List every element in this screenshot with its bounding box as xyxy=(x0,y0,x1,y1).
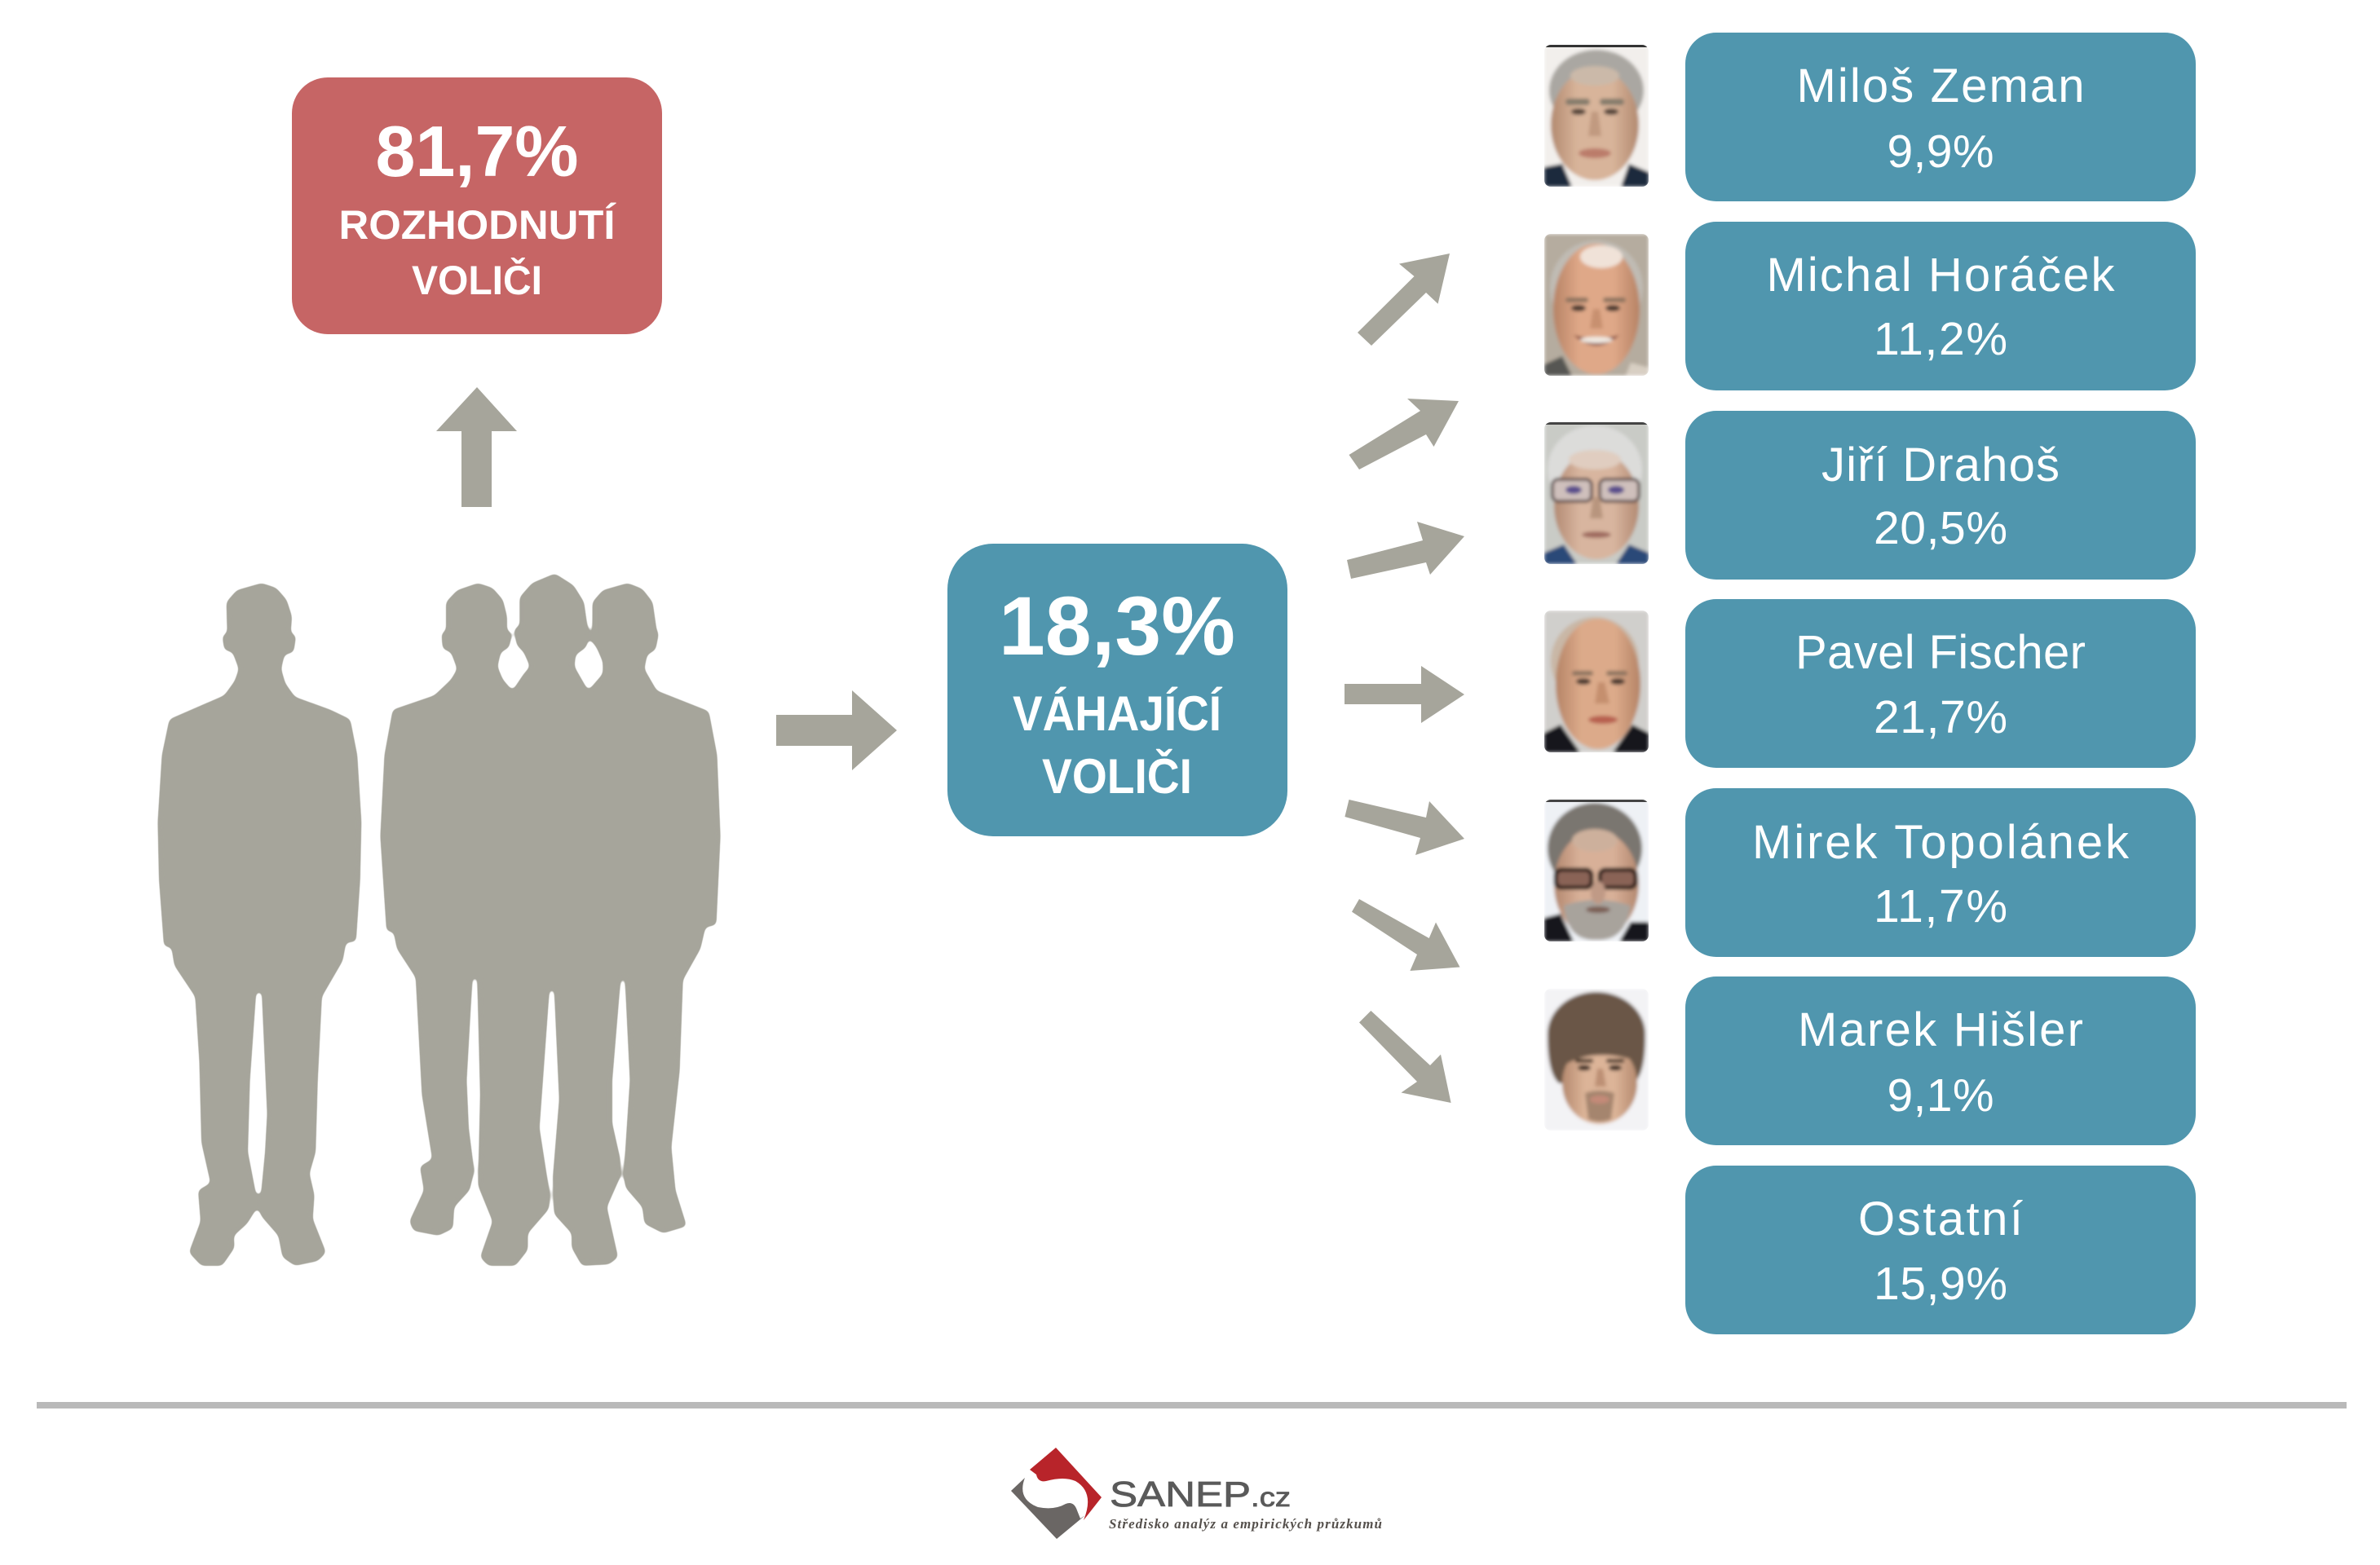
portrait: Mirek Topolánek xyxy=(1544,800,1649,941)
portrait: Jiří Drahoš xyxy=(1544,422,1649,564)
arrow: to Hišler upper xyxy=(1352,899,1459,971)
panel: Ostatní result: 15,9% xyxy=(1874,1258,2007,1310)
panel: Pavel Fischer result: Pavel Fischer xyxy=(1795,626,2086,679)
panel: Mirek Topolánek result: 11,7% xyxy=(1874,880,2007,932)
panel: Mirek Topolánek result xyxy=(1685,788,2196,957)
panel: Ostatní result: Ostatní xyxy=(1858,1192,2023,1245)
panel: Mirek Topolánek result: Mirek Topolánek xyxy=(1752,816,2130,869)
panel: Miloš Zeman result xyxy=(1685,33,2196,201)
panel: undecided voters box xyxy=(947,544,1287,836)
logo tagline: Středisko analýz a empirických průzkumů xyxy=(1109,1516,1382,1532)
decided voters label: ROZHODNUTÍ xyxy=(339,202,616,248)
panel: Marek Hišler result: 9,1% xyxy=(1887,1069,1994,1122)
arrow: to Topolánek xyxy=(1345,800,1464,855)
panel: decided voters box xyxy=(292,77,662,334)
logo wordmark: SANEP .cz xyxy=(1110,1475,1291,1514)
undecided voters label: VÁHAJÍCÍ xyxy=(1013,686,1222,741)
panel: Marek Hišler result xyxy=(1685,976,2196,1145)
arrow: to Fischer xyxy=(1345,666,1464,723)
panel: Pavel Fischer result xyxy=(1685,599,2196,768)
arrow: to Zeman xyxy=(1358,253,1450,346)
icon: SANEP diamond xyxy=(1011,1448,1102,1539)
panel: Marek Hišler result: Marek Hišler xyxy=(1798,1003,2083,1056)
panel: Jiří Drahoš result: 20,5% xyxy=(1874,502,2007,554)
decided voters label xyxy=(339,202,616,303)
panel: Michal Horáček result: Michal Horáček xyxy=(1766,249,2115,302)
panel: Miloš Zeman result: 9,9% xyxy=(1887,126,1994,178)
logo: SANEP xyxy=(1011,1448,1382,1539)
arrow: to Horáček xyxy=(1349,399,1459,470)
panel: Jiří Drahoš result xyxy=(1685,411,2196,580)
portrait: Pavel Fischer xyxy=(1544,611,1649,752)
arrow: to Hišler lower xyxy=(1359,1011,1451,1103)
portrait: Michal Horáček xyxy=(1544,234,1649,376)
icon: group of three silhouettes xyxy=(380,573,721,1266)
panel: Miloš Zeman result: Miloš Zeman xyxy=(1797,60,2084,112)
portrait: Miloš Zeman xyxy=(1544,45,1649,187)
undecided voters label: VOLIČI xyxy=(1042,749,1192,804)
decided voters label: VOLIČI xyxy=(412,257,542,303)
panel: Michal Horáček result xyxy=(1685,222,2196,390)
divider xyxy=(37,1402,2347,1408)
icon: voter silhouettes xyxy=(157,573,721,1266)
arrow: to Drahoš xyxy=(1347,522,1464,579)
panel: Pavel Fischer result: 21,7% xyxy=(1874,691,2007,743)
undecided voters label xyxy=(1013,686,1222,804)
portrait: Marek Hišler xyxy=(1544,989,1649,1131)
panel: Jiří Drahoš result: Jiří Drahoš xyxy=(1821,439,2060,492)
panel: Ostatní result xyxy=(1685,1166,2196,1334)
arrow: voters to undecided xyxy=(776,690,897,770)
arrow: up to decided voters xyxy=(436,387,517,507)
decided voters percentage: 81,7% xyxy=(375,111,579,192)
icon: single silhouette xyxy=(157,583,361,1266)
undecided voters percentage: 18,3% xyxy=(999,580,1235,672)
panel: Michal Horáček result: 11,2% xyxy=(1874,313,2007,365)
